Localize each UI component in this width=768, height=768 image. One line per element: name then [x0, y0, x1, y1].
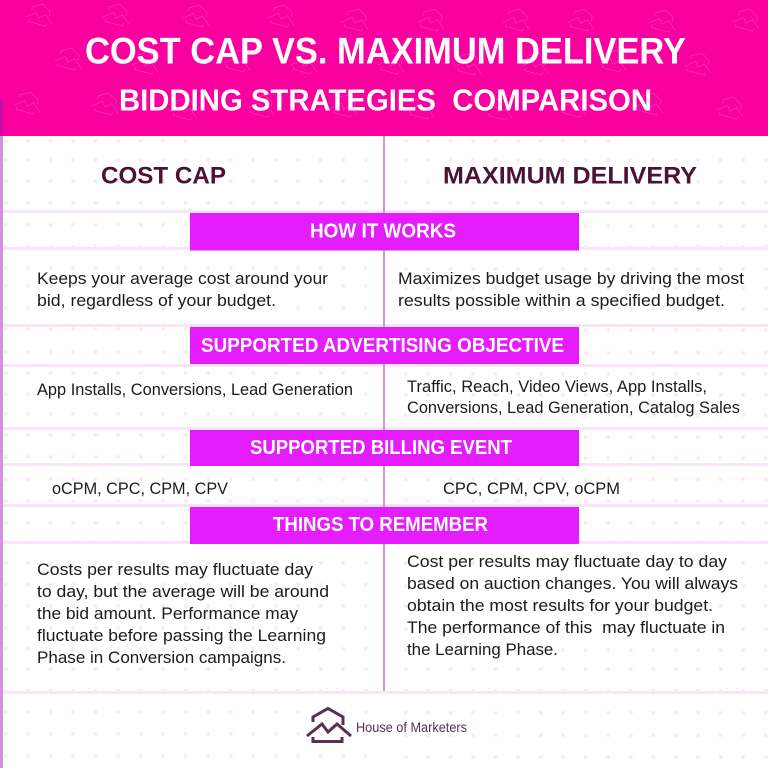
text: maximum delivery reminders: Cost per results may fluctuate day to day — [407, 553, 728, 571]
section: supported advertising objective — [190, 327, 579, 364]
section: things to remember — [190, 507, 579, 544]
text: maximum delivery reminders — [407, 553, 738, 659]
text: cost cap how it works: Keeps your average cost around your — [37, 270, 329, 288]
header icon pattern — [13, 1, 763, 122]
icon: house logo — [307, 708, 351, 742]
text: cost cap reminders: Costs per results may fluctuate day — [37, 561, 314, 579]
text: maximum delivery reminders: The performance of this may fluctuate in — [407, 619, 725, 637]
text: maximum delivery reminders: the Learning Phase. — [407, 641, 558, 659]
column heading: maximum delivery: MAXIMUM DELIVERY — [443, 162, 697, 190]
text: cost cap reminders — [37, 561, 329, 667]
text: maximum delivery how it works: results possible within a specified budget. — [398, 292, 725, 310]
section: supported billing event: SUPPORTED BILLING EVENT — [250, 437, 512, 459]
text: cost cap how it works — [37, 270, 329, 310]
section: supported advertising objective: SUPPORTED ADVERTISING OBJECTIVE — [201, 335, 564, 357]
column heading: cost cap: COST CAP — [101, 162, 226, 190]
text: cost cap reminders: the bid amount. Performance may — [37, 605, 299, 623]
text: cost cap reminders: to day, but the average will be around — [37, 583, 329, 601]
text: maximum delivery objectives — [407, 378, 740, 417]
section: how it works — [190, 213, 579, 250]
text: maximum delivery objectives: Traffic, Reach, Video Views, App Installs, — [407, 378, 707, 396]
text: cost cap reminders: fluctuate before passing the Learning — [37, 627, 326, 645]
text: maximum delivery reminders: obtain the most results for your budget. — [407, 597, 713, 615]
section: things to remember: THINGS TO REMEMBER — [273, 514, 489, 536]
text: cost cap how it works: bid, regardless of your budget. — [37, 292, 276, 310]
footer logo — [307, 708, 467, 742]
section: how it works: HOW IT WORKS — [310, 220, 456, 242]
text: maximum delivery how it works — [398, 270, 744, 310]
text: maximum delivery reminders: based on auction changes. You will always — [407, 575, 738, 593]
text: cost cap objectives: App Installs, Conversions, Lead Generation — [37, 381, 353, 399]
header banner — [0, 0, 768, 136]
title: COST CAP VS. MAXIMUM DELIVERY — [85, 30, 686, 72]
text: maximum delivery objectives: Conversions, Lead Generation, Catalog Sales — [407, 399, 740, 417]
section: supported billing event — [190, 430, 579, 466]
text: maximum delivery how it works: Maximizes budget usage by driving the most — [398, 270, 744, 288]
text: cost cap reminders: Phase in Conversion campaigns. — [37, 649, 286, 667]
text: cost cap billing events: oCPM, CPC, CPM, CPV — [52, 480, 228, 498]
brand name: House of Marketers — [356, 720, 467, 735]
text: maximum delivery billing events: CPC, CPM, CPV, oCPM — [443, 480, 620, 498]
subtitle: BIDDING STRATEGIES COMPARISON — [119, 82, 652, 118]
